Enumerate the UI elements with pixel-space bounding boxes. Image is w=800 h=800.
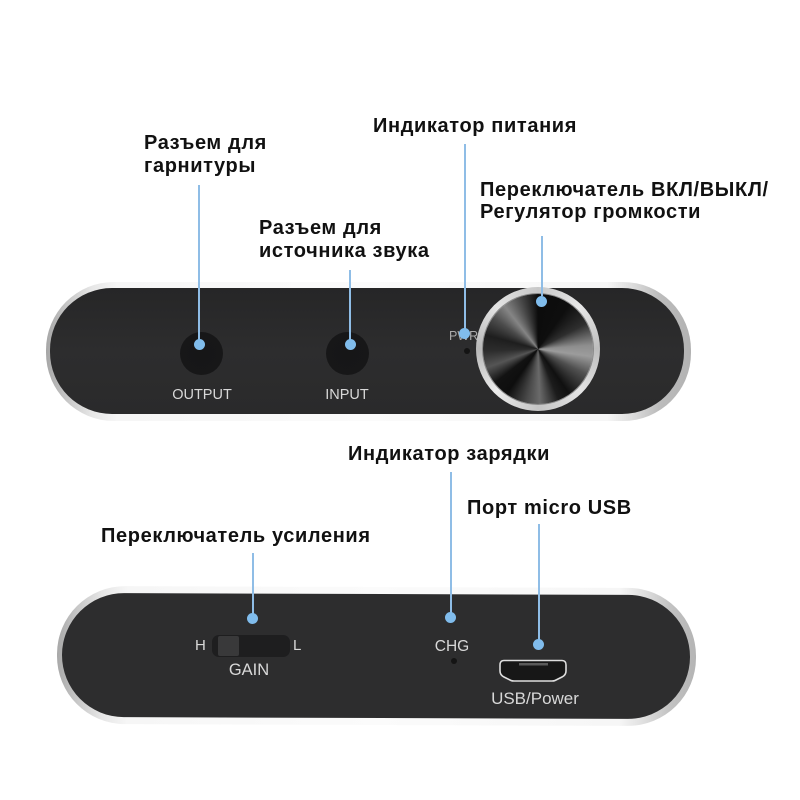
pointer line [198,185,200,345]
pointer dot [533,639,544,650]
icon: charge LED [451,658,457,664]
callout: source jack [259,217,430,350]
pointer dot [536,296,547,307]
device label: PWR: PWR [449,329,478,343]
device label: INPUT: INPUT [325,387,369,403]
pointer dot [459,328,470,339]
pointer dot [344,339,356,350]
icon: volume knob [476,287,600,411]
pointer line [450,472,452,617]
icon: micro USB port [499,660,567,682]
device label: L: L [293,637,301,654]
heading: headset jack [144,132,267,177]
pointer line [349,270,350,345]
icon: input jack [326,332,369,375]
panel: top device face [46,282,691,421]
pointer dot [247,613,258,624]
metal rim [57,586,696,726]
pointer line [252,553,254,618]
dark face [50,288,684,414]
heading: headset jack: Разъем для [144,132,267,154]
heading: power switch and volume: Регулятор громкости [480,201,701,223]
pointer line [541,236,542,296]
device label: USB/Power: USB/Power [491,689,579,708]
heading: charge indicator: Индикатор зарядки [348,443,550,465]
panel: bottom device face [57,586,696,726]
callout: micro USB port [467,497,632,650]
pointer dot [445,612,456,623]
callout: power switch and volume [480,179,769,307]
device label: H: H [195,637,206,654]
heading: power switch and volume: Переключатель ВКЛ/ВЫКЛ/ [480,179,769,201]
icon: output jack [180,332,223,375]
heading: source jack: Разъем для [259,217,382,239]
pointer dot [194,339,205,350]
heading: gain switch: Переключатель усиления [101,525,371,547]
knob face [483,294,593,404]
callout: power indicator [373,115,577,339]
pointer line [538,524,540,646]
icon: gain switch [212,635,290,657]
callout: charge indicator [348,443,550,623]
switch slider [218,636,239,656]
heading: source jack: источника звука [259,240,430,262]
device label: GAIN: GAIN [229,661,269,679]
icon: power LED [464,348,470,354]
callout: gain switch [101,525,371,624]
heading: source jack [259,217,430,262]
dark face [62,593,690,719]
pointer line [464,144,466,334]
heading: power indicator: Индикатор питания [373,115,577,137]
heading: micro USB port: Порт micro USB [467,497,632,519]
callout: headset jack [144,132,267,350]
heading: power switch and volume [480,179,769,223]
heading: headset jack: гарнитуры [144,155,256,177]
device label: OUTPUT: OUTPUT [172,387,232,403]
metal rim [46,282,691,421]
device label: CHG: CHG [435,638,469,655]
